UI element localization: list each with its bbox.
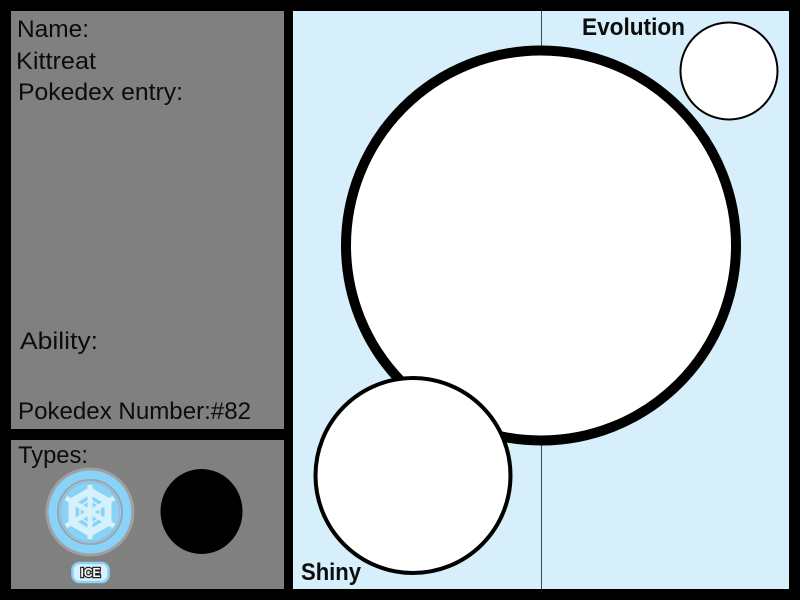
label: pokedex entry: Pokedex entry:: [18, 79, 183, 106]
panel: artwork: [293, 11, 789, 589]
evolution circle: [680, 22, 778, 120]
main artwork circle: [346, 50, 736, 440]
name value: Kittreat: [16, 48, 96, 75]
heading: shiny: Shiny: [301, 559, 362, 586]
label: ability: Ability:: [20, 328, 98, 355]
second type placeholder: [160, 469, 242, 554]
shiny circle: [316, 378, 510, 573]
pokedex number: Pokedex Number:#82: [18, 398, 251, 425]
heading: evolution: Evolution: [582, 14, 685, 41]
label: name: Name:: [17, 16, 89, 43]
panel: types: [11, 440, 284, 589]
icon: ice label: ICE: [80, 565, 101, 580]
icon: ice type badge: [47, 469, 133, 555]
icon: ice label: [72, 563, 108, 582]
label: types: Types:: [18, 442, 88, 469]
panel: info: [11, 11, 284, 429]
